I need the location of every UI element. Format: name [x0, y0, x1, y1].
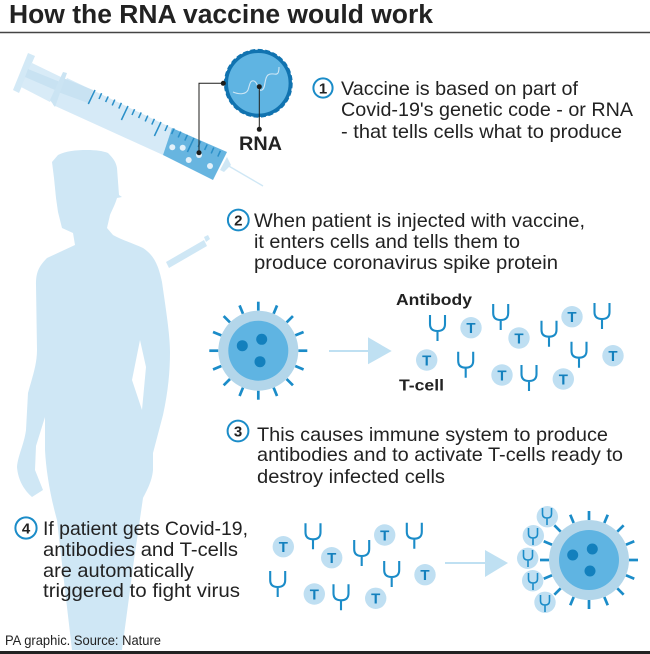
T-cells: T — [567, 309, 577, 326]
small syringe at shoulder — [166, 235, 210, 268]
title: How the RNA vaccine would work — [9, 1, 434, 29]
antibodies — [270, 523, 422, 610]
badge 3: 3 — [234, 424, 242, 440]
T-cells: T — [327, 550, 336, 567]
barrel — [53, 78, 172, 155]
RNA particle — [225, 50, 292, 117]
graduation ticks — [88, 90, 220, 157]
step 1 — [313, 78, 633, 143]
infected cell — [209, 302, 307, 400]
T-cells — [273, 524, 436, 609]
step 1: Covid-19's genetic code - or RNA — [341, 99, 633, 121]
T-cells: T — [497, 367, 507, 384]
T-cells: T — [466, 320, 476, 337]
step 3 — [228, 421, 623, 488]
bound antibodies — [517, 506, 558, 613]
T-cells: T — [420, 567, 430, 584]
step 1: - that tells cells what to produce — [341, 121, 622, 143]
badge 3 — [228, 421, 248, 441]
plunger cap — [13, 53, 35, 93]
step 3: This causes immune system to produce — [257, 424, 608, 446]
T-cells: T — [279, 539, 288, 556]
label: antibody: Antibody — [396, 292, 472, 309]
step 3: antibodies and to activate T-cells ready to — [257, 444, 623, 466]
second antibodies and T-cells cluster — [270, 523, 436, 610]
nozzle and needle — [220, 157, 231, 172]
RNA particles in liquid — [169, 144, 213, 169]
badge 4: 4 — [22, 520, 31, 538]
person silhouette — [17, 150, 170, 650]
badge 2 — [228, 210, 249, 230]
syringe — [13, 53, 263, 186]
step 4: antibodies and T-cells — [43, 539, 238, 561]
step 4: triggered to fight virus — [43, 580, 240, 602]
antibodies — [430, 303, 610, 391]
T-cells: T — [559, 371, 568, 388]
step 2: When patient is injected with vaccine, — [254, 210, 585, 232]
liquid — [163, 128, 227, 180]
badge 4 — [15, 517, 37, 539]
T-cells: T — [514, 330, 524, 347]
step 4: If patient gets Covid-19, — [43, 518, 248, 540]
infected cell attacked by antibodies — [517, 506, 638, 613]
source credit: PA graphic. Source: Nature — [5, 633, 161, 648]
T-cells — [416, 306, 624, 390]
T-cells: T — [310, 586, 319, 603]
leader lines — [196, 81, 262, 155]
RNA label: RNA — [239, 133, 282, 155]
T-cells: T — [608, 348, 618, 365]
plunger rod — [21, 63, 63, 102]
T-cells: T — [371, 591, 380, 608]
step 2: it enters cells and tells them to — [254, 231, 520, 253]
badge 2: 2 — [234, 212, 242, 230]
step 2: produce coronavirus spike protein — [254, 252, 558, 274]
antibodies and T-cells cluster — [416, 303, 624, 391]
badge 1: 1 — [319, 80, 327, 98]
T-cells: T — [422, 352, 431, 369]
label: T-cell: T-cell — [399, 378, 444, 394]
RNA strand — [233, 67, 279, 94]
arrow — [445, 550, 508, 577]
badge 1 — [313, 78, 333, 98]
step 3: destroy infected cells — [257, 466, 445, 488]
step 1: Vaccine is based on part of — [341, 78, 579, 100]
step 4 — [15, 517, 248, 602]
step 2 — [228, 210, 585, 274]
T-cells: T — [380, 527, 389, 544]
step 4: are automatically — [43, 560, 194, 582]
arrow — [329, 337, 392, 364]
